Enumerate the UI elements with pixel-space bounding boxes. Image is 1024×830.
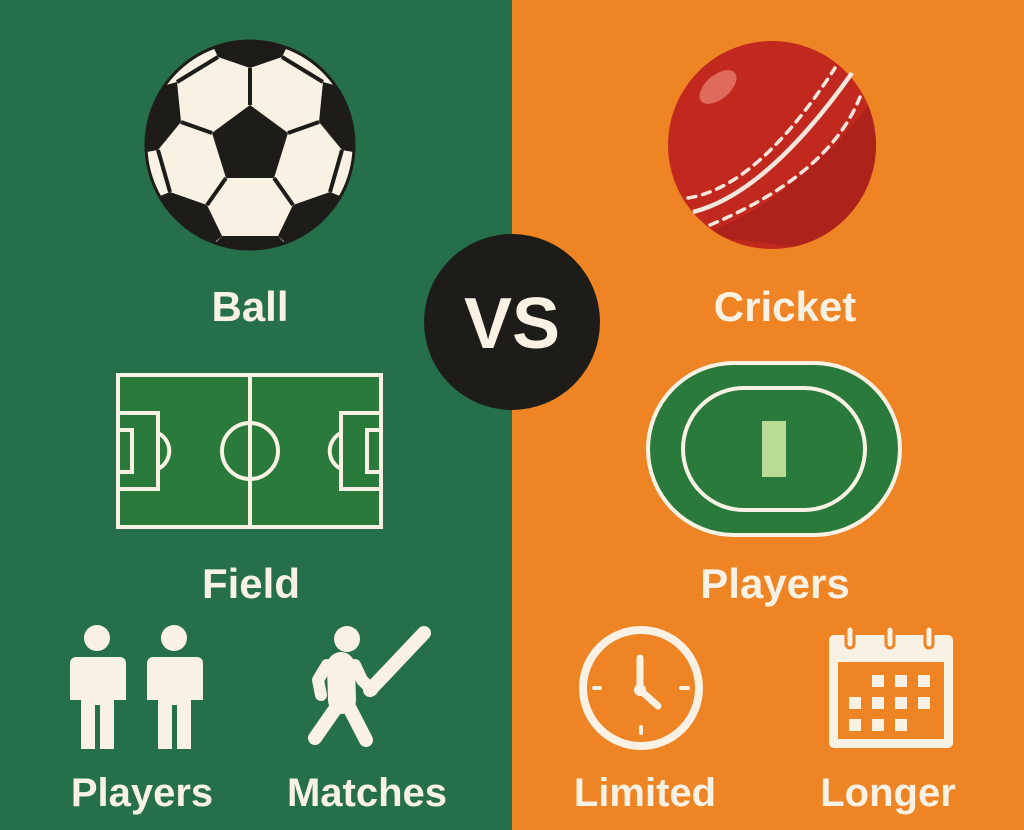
icon: football field [118, 375, 381, 527]
label: Players (football): Players [71, 771, 213, 815]
label: Longer: Longer [820, 771, 956, 815]
panel: football (green) [0, 0, 512, 830]
icon: soccer ball [144, 40, 356, 250]
icon: two players [70, 625, 203, 749]
icon: cricket oval [648, 363, 900, 535]
icon: clock [583, 630, 699, 746]
label: Cricket: Cricket [714, 283, 856, 330]
label: Limited: Limited [574, 771, 716, 815]
VS badge [424, 234, 600, 410]
panel: cricket (orange) [512, 0, 1024, 830]
icon: cricket ball [668, 41, 876, 249]
label: Matches: Matches [287, 771, 447, 815]
VS badge: VS [464, 284, 560, 364]
icon: batter [315, 626, 424, 740]
label: Players (cricket): Players [700, 560, 850, 607]
icon: calendar [829, 626, 953, 748]
label: Field: Field [202, 560, 300, 607]
label: Ball: Ball [211, 283, 289, 330]
